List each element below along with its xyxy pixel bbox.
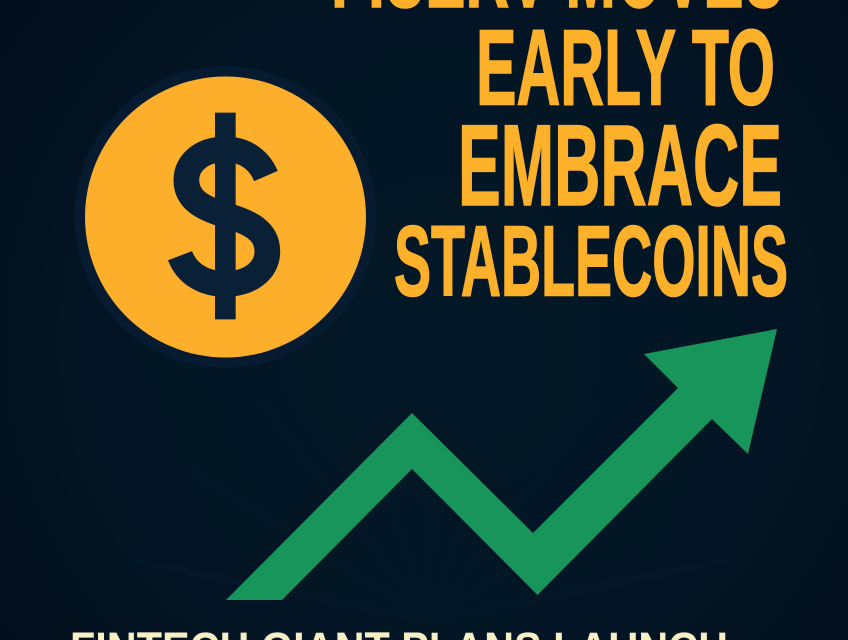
title	[331, 0, 788, 318]
icon: dollar coin	[74, 66, 376, 368]
icon: dollar sign	[180, 113, 267, 319]
arrow: rising green trend	[226, 329, 777, 600]
